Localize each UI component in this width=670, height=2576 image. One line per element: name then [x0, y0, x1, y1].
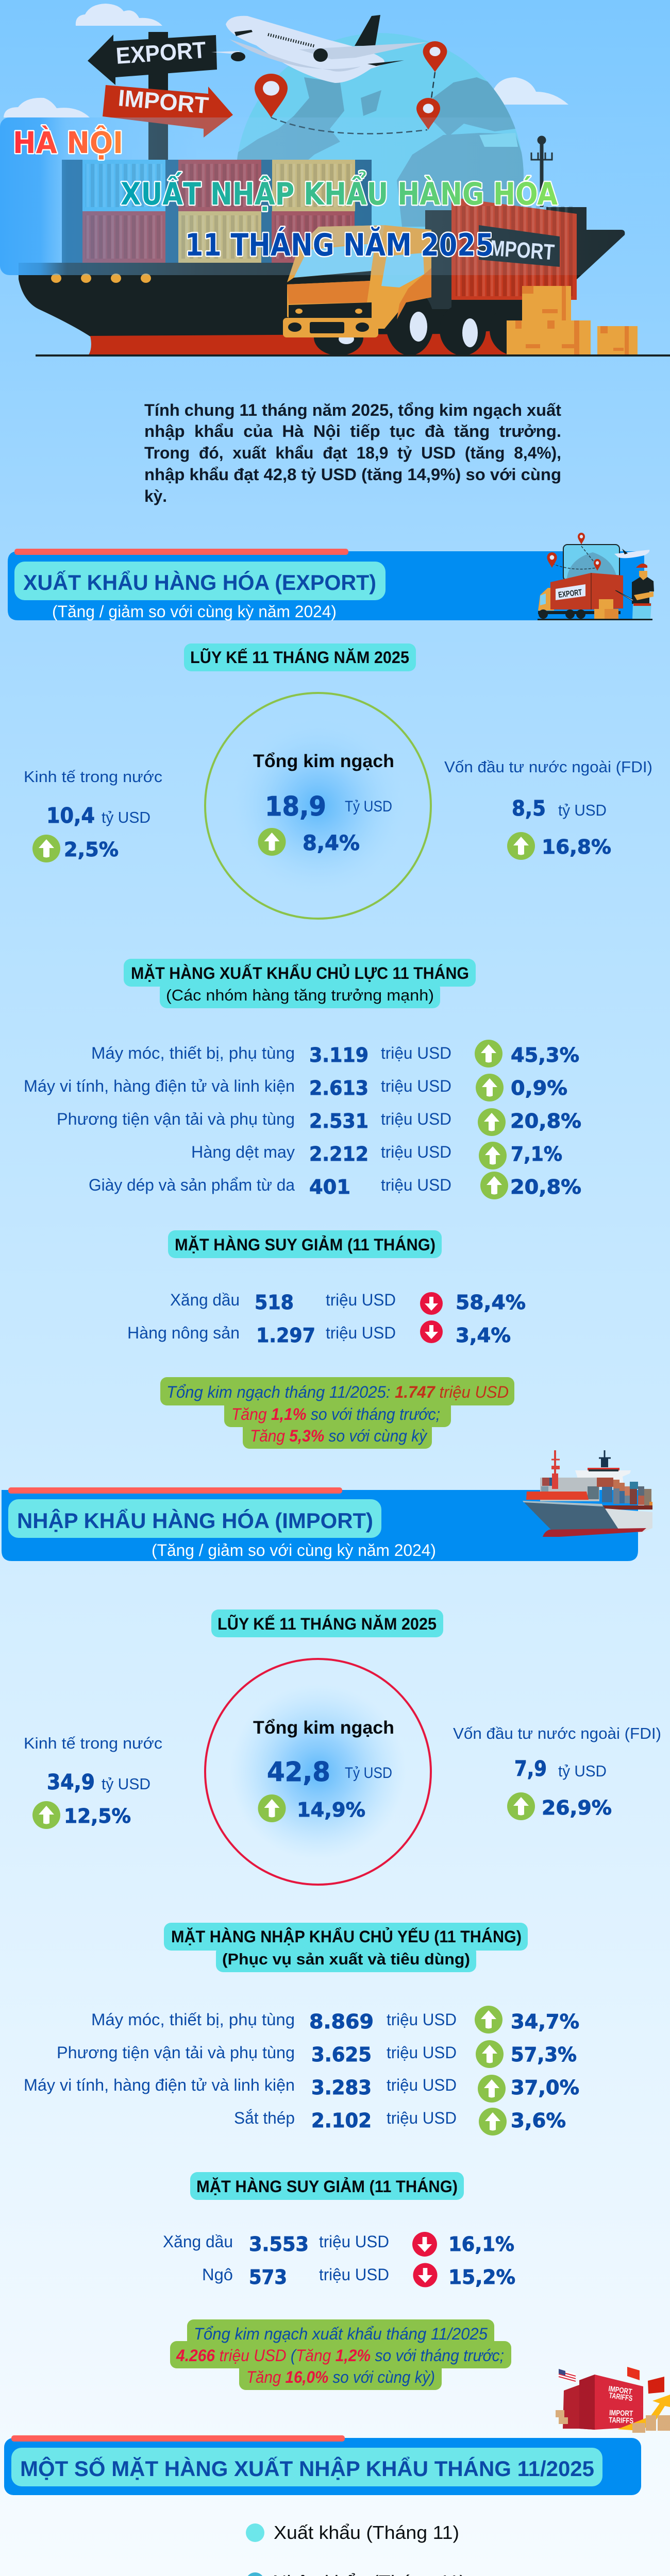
key imports heading: (Phục vụ sản xuất và tiêu dùng) — [222, 1950, 470, 1968]
export section header — [8, 533, 654, 621]
key imports heading — [164, 1923, 528, 1972]
row: steel: triệu USD — [387, 2109, 457, 2127]
row: computers: 3.283 — [311, 2076, 372, 2099]
row: petrol: 518 — [255, 1291, 294, 1314]
domestic unit: tỷ USD — [102, 1775, 150, 1793]
red containers: IMPORT — [609, 2409, 633, 2418]
comparison heading pill — [11, 2448, 602, 2486]
row: farm products — [127, 1320, 511, 1347]
key exports heading: MẶT HÀNG XUẤT KHẨU CHỦ LỰC 11 THÁNG — [131, 964, 469, 982]
hero title: Hà Nội: HÀ NỘI — [13, 125, 123, 160]
row: machinery: 8.869 — [309, 2010, 374, 2033]
row: petrol: Xăng dầu — [163, 2232, 233, 2251]
export cumulative heading: LŨY KẾ 11 THÁNG NĂM 2025 — [190, 648, 409, 667]
row: farm products: 3,4% — [456, 1324, 511, 1347]
row: computers: triệu USD — [381, 1077, 451, 1095]
chart legend — [246, 2522, 466, 2576]
globe — [237, 33, 524, 229]
export monthly callout — [160, 1377, 514, 1449]
comparison banner — [4, 2438, 641, 2495]
intro paragraph: kỳ. — [144, 487, 167, 505]
comparison heading: MỘT SỐ MẶT HÀNG XUẤT NHẬP KHẨU THÁNG 11/2025 — [20, 2456, 594, 2481]
declining exports heading: MẶT HÀNG SUY GIẢM (11 THÁNG) — [175, 1235, 435, 1254]
icon: up arrow — [258, 1794, 286, 1822]
row: steel — [234, 2108, 566, 2136]
FDI sector export: Vốn đầu tư nước ngoài (FDI) — [444, 758, 652, 776]
import total circle — [205, 1659, 431, 1885]
intro paragraph: Tính chung 11 tháng năm 2025, tổng kim ngạch xuất — [144, 401, 561, 419]
row: textiles: 7,1% — [511, 1143, 562, 1165]
dashed route — [271, 72, 435, 134]
row: textiles: triệu USD — [381, 1143, 451, 1161]
icon: up arrow — [258, 828, 286, 856]
icon: export truck and worker — [538, 533, 654, 620]
row: textiles: Hàng dệt may — [191, 1143, 295, 1161]
red containers: IMPORT — [608, 2384, 632, 2396]
row: footwear: 20,8% — [510, 1176, 581, 1198]
row: corn: 15,2% — [448, 2266, 515, 2289]
export sign: EXPORT — [115, 37, 207, 69]
row: petrol: 58,4% — [456, 1291, 526, 1314]
row: computers: 0,9% — [511, 1077, 567, 1099]
US flag — [559, 2369, 576, 2383]
row: machinery: 45,3% — [511, 1044, 579, 1066]
row: farm products: 1.297 — [256, 1324, 315, 1347]
total unit: Tỷ USD — [345, 798, 392, 815]
legend: export: Xuất khẩu (Tháng 11) — [274, 2522, 459, 2543]
row: machinery: Máy móc, thiết bị, phụ tùng — [91, 2010, 295, 2029]
total growth: 14,9% — [297, 1799, 365, 1821]
row: computers: 2.613 — [309, 1077, 368, 1099]
row: corn: Ngô — [202, 2265, 233, 2284]
cardboard boxes — [556, 2410, 670, 2433]
row: machinery: Máy móc, thiết bị, phụ tùng — [91, 1044, 295, 1062]
row: vehicles: 2.531 — [309, 1110, 368, 1132]
location pin top — [423, 41, 447, 72]
row: machinery: 3.119 — [309, 1044, 368, 1066]
intro paragraph: nhập khẩu của Hà Nội tiếp tục đà tăng trưởng. — [144, 422, 561, 440]
red accent stripe — [8, 1487, 342, 1494]
yellow growth arrow — [617, 2395, 670, 2431]
import section header — [2, 1450, 652, 1561]
cloud right — [490, 77, 568, 105]
row: vehicles: 20,8% — [510, 1110, 581, 1132]
portholes — [51, 274, 151, 283]
truck container: IMPORT — [484, 235, 555, 265]
row: computers — [24, 2075, 579, 2103]
export cumulative heading — [184, 643, 416, 671]
export subtitle: (Tăng / giảm so với cùng kỳ năm 2024) — [52, 602, 337, 621]
row: footwear: 401 — [309, 1176, 350, 1198]
import monthly callout: Tăng 16,0% so với cùng kỳ) — [246, 2368, 435, 2386]
row: petrol: 3.553 — [249, 2233, 309, 2256]
intro paragraph: nhập khẩu đạt 42,8 tỷ USD (tăng 14,9%) so với cùng — [144, 465, 561, 484]
export banner — [8, 551, 644, 620]
cargo boxes — [507, 286, 638, 355]
total label: Tổng kim ngạch — [253, 1718, 394, 1738]
import sign — [103, 84, 233, 138]
row: vehicles: triệu USD — [387, 2043, 457, 2062]
FDI unit: tỷ USD — [558, 1762, 607, 1780]
row: corn: 573 — [249, 2266, 287, 2289]
declining exports heading — [168, 1230, 442, 1258]
import monthly callout: Tổng kim ngạch xuất khẩu tháng 11/2025 — [194, 2325, 488, 2343]
row: vehicles: Phương tiện vận tải và phụ tùng — [57, 1110, 295, 1128]
cloud left — [4, 98, 90, 117]
sign post — [148, 32, 168, 163]
row: vehicles — [57, 1108, 581, 1136]
export monthly callout: Tổng kim ngạch tháng 11/2025: 1.747 triệu USD — [166, 1383, 509, 1401]
row: steel: 3,6% — [511, 2109, 566, 2132]
total value: 18,9 — [265, 791, 326, 822]
row: computers — [24, 1074, 567, 1101]
domestic sector import — [24, 1734, 162, 1829]
row: petrol: Xăng dầu — [170, 1291, 240, 1309]
row: petrol: triệu USD — [326, 1291, 396, 1309]
row: computers: Máy vi tính, hàng điện tử và linh kiện — [24, 1077, 295, 1095]
row: petrol: triệu USD — [319, 2232, 389, 2251]
domestic growth: 12,5% — [64, 1805, 131, 1827]
row: textiles — [191, 1142, 562, 1170]
total label: Tổng kim ngạch — [253, 751, 394, 771]
declining imports table — [163, 2232, 515, 2289]
key imports table — [24, 2006, 579, 2136]
import heading: NHẬP KHẨU HÀNG HÓA (IMPORT) — [17, 1508, 373, 1533]
row: vehicles: Phương tiện vận tải và phụ tùng — [57, 2043, 295, 2062]
truck wheels — [314, 289, 541, 355]
domestic sector import: Kinh tế trong nước — [24, 1734, 162, 1752]
row: vehicles: 57,3% — [511, 2043, 577, 2066]
comparison section header — [4, 2435, 641, 2495]
key exports heading — [124, 959, 476, 1008]
FDI growth: 26,9% — [542, 1797, 612, 1819]
row: machinery — [91, 1040, 579, 1067]
red containers — [563, 2375, 643, 2430]
truck cab — [283, 225, 431, 337]
export heading: XUẤT KHẨU HÀNG HÓA (EXPORT) — [23, 570, 376, 595]
location pin left — [255, 74, 288, 117]
export monthly callout: Tăng 1,1% so với tháng trước; — [231, 1405, 440, 1423]
icon: container ship — [523, 1450, 652, 1537]
row: vehicles: triệu USD — [381, 1110, 451, 1128]
FDI value: 8,5 — [512, 796, 546, 821]
FDI value: 7,9 — [514, 1756, 547, 1781]
key exports heading: (Các nhóm hàng tăng trưởng mạnh) — [166, 986, 434, 1004]
hero illustration — [4, 4, 670, 357]
FDI sector import — [453, 1724, 661, 1820]
export monthly callout: Tăng 5,3% so với cùng kỳ — [250, 1427, 428, 1445]
row: vehicles — [57, 2040, 577, 2068]
intro paragraph — [144, 401, 561, 505]
export heading pill — [14, 562, 386, 600]
row: computers: Máy vi tính, hàng điện tử và linh kiện — [24, 2076, 295, 2094]
row: petrol: 16,1% — [448, 2233, 514, 2256]
FDI sector export — [444, 758, 652, 860]
domestic unit: tỷ USD — [102, 808, 150, 826]
row: farm products: Hàng nông sản — [127, 1324, 240, 1342]
row: petrol — [163, 2232, 514, 2257]
icon: up arrow — [32, 835, 60, 862]
location pin middle — [416, 98, 440, 130]
containers — [62, 160, 372, 263]
red waterline — [89, 330, 508, 355]
export total circle — [205, 693, 431, 919]
red containers: TARIFFS — [609, 2416, 633, 2426]
ship hull — [19, 207, 625, 355]
domestic growth: 2,5% — [64, 838, 119, 861]
China flag — [648, 2377, 664, 2394]
icon: import tariffs containers — [556, 2367, 670, 2433]
hero title: 11 tháng năm 2025: 11 THÁNG NĂM 2025 — [185, 226, 494, 263]
key imports heading: MẶT HÀNG NHẬP KHẨU CHỦ YẾU (11 THÁNG) — [171, 1927, 522, 1946]
import monthly callout: 4.266 triệu USD (Tăng 1,2% so với tháng trước; — [176, 2346, 504, 2365]
ship mast — [531, 136, 552, 207]
total growth: 8,4% — [303, 832, 360, 855]
import subtitle: (Tăng / giảm so với cùng kỳ năm 2024) — [152, 1541, 436, 1560]
row: farm products: triệu USD — [326, 1324, 396, 1342]
red containers: TARIFFS — [608, 2391, 633, 2403]
icon: up arrow — [507, 1792, 535, 1820]
total unit: Tỷ USD — [345, 1765, 392, 1782]
row: textiles: 2.212 — [309, 1143, 368, 1165]
FDI sector import: Vốn đầu tư nước ngoài (FDI) — [453, 1724, 661, 1742]
cloud top left — [76, 4, 162, 26]
row: corn — [202, 2263, 515, 2289]
domestic value: 10,4 — [46, 803, 95, 828]
domestic value: 34,9 — [47, 1770, 95, 1794]
key exports table — [24, 1040, 581, 1199]
red accent stripe — [14, 549, 348, 555]
row: footwear: triệu USD — [381, 1176, 451, 1194]
row: machinery — [91, 2006, 579, 2033]
row: machinery: 34,7% — [511, 2010, 579, 2033]
export sign — [88, 35, 217, 85]
row: machinery: triệu USD — [387, 2010, 457, 2029]
icon: up arrow — [507, 832, 535, 860]
import monthly callout — [170, 2319, 511, 2390]
hero title: Xuất nhập khẩu hàng hóa: XUẤT NHẬP KHẨU HÀNG HÓA — [121, 170, 558, 212]
import cumulative heading: LŨY KẾ 11 THÁNG NĂM 2025 — [217, 1615, 437, 1633]
domestic sector export: Kinh tế trong nước — [24, 768, 162, 786]
title band — [0, 117, 670, 275]
row: steel: Sắt thép — [234, 2109, 295, 2127]
row: steel: 2.102 — [311, 2109, 372, 2132]
row: vehicles: 3.625 — [311, 2043, 372, 2066]
icon: export truck and worker: EXPORT — [558, 588, 582, 600]
row: footwear: Giày dép và sản phẩm từ da — [89, 1176, 295, 1194]
FDI unit: tỷ USD — [558, 801, 607, 819]
ground line — [36, 354, 670, 357]
truck container — [425, 197, 577, 309]
total value: 42,8 — [267, 1757, 330, 1788]
intro paragraph: Trong đó, xuất khẩu đạt 18,9 tỷ USD (tăng 8,4%), — [144, 444, 561, 462]
declining exports table — [127, 1291, 526, 1347]
row: machinery: triệu USD — [381, 1044, 451, 1062]
row: computers: 37,0% — [511, 2076, 579, 2099]
airplane — [211, 15, 427, 83]
row: computers: triệu USD — [387, 2076, 457, 2094]
row: footwear — [89, 1172, 581, 1199]
China flag — [627, 2367, 640, 2380]
import cumulative heading — [211, 1609, 443, 1637]
import sign: IMPORT — [117, 84, 210, 118]
row: petrol — [170, 1291, 526, 1315]
red accent stripe — [11, 2435, 345, 2442]
FDI growth: 16,8% — [542, 836, 611, 858]
import heading pill — [8, 1499, 381, 1538]
declining imports heading — [190, 2172, 464, 2200]
row: corn: triệu USD — [319, 2265, 389, 2284]
domestic sector export — [24, 768, 162, 862]
declining imports heading: MẶT HÀNG SUY GIẢM (11 THÁNG) — [196, 2177, 458, 2196]
icon: up arrow — [32, 1801, 60, 1829]
import banner — [2, 1490, 638, 1561]
